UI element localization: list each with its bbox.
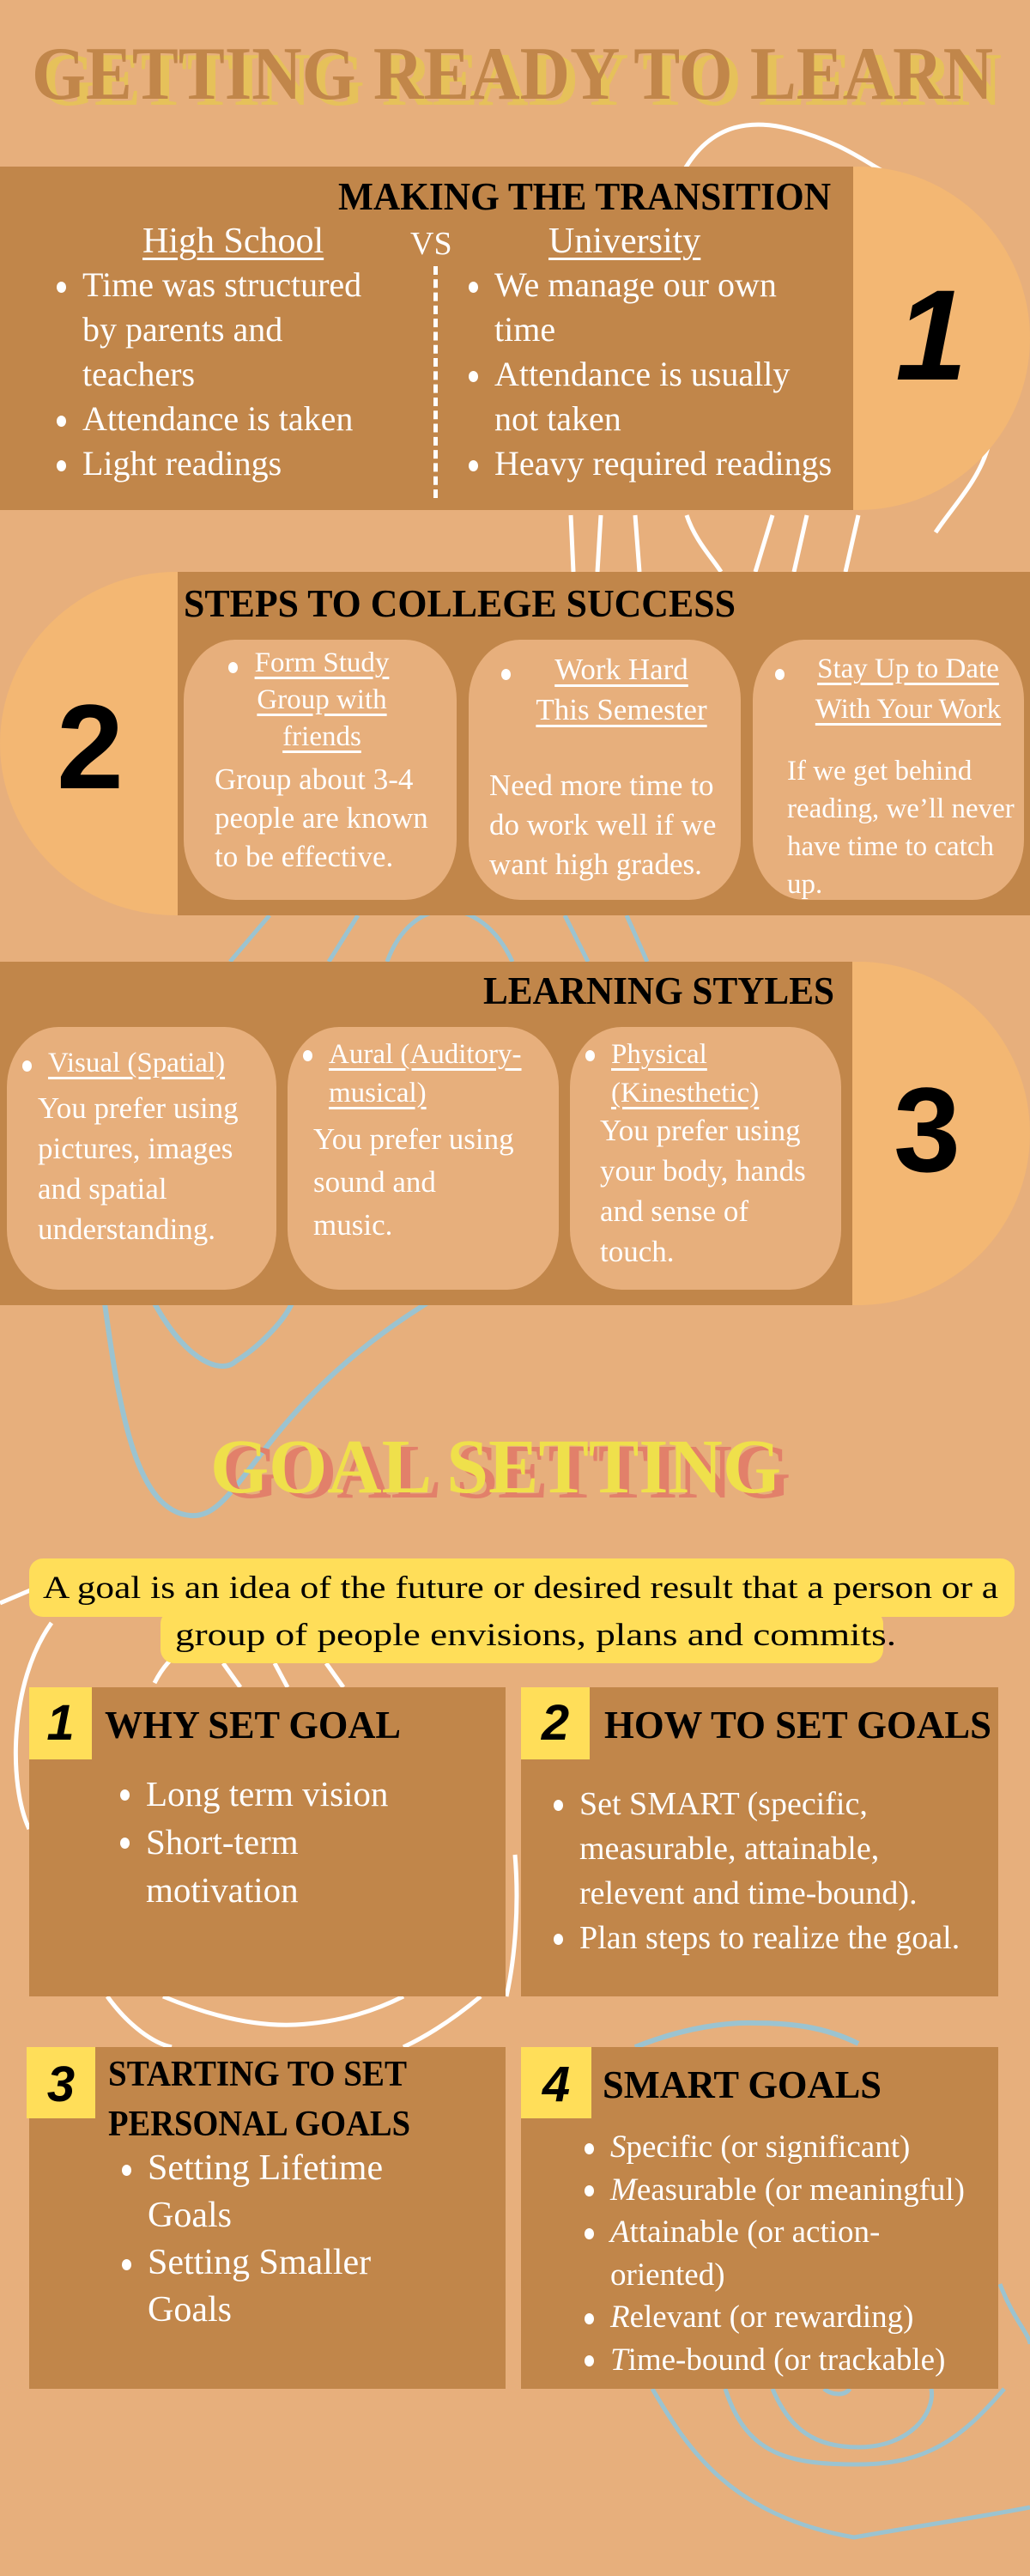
- list: Long term vision: [146, 1774, 388, 1814]
- card body: up.: [787, 869, 822, 900]
- card body: touch.: [600, 1235, 675, 1268]
- list: Goals: [148, 2196, 232, 2235]
- card title: Visual (Spatial): [48, 1048, 225, 1078]
- card body: sound and: [313, 1165, 436, 1199]
- card title: [254, 647, 390, 753]
- card title: Group with: [257, 684, 387, 715]
- column heading high school: High School: [142, 222, 324, 261]
- smart list: oriented): [610, 2257, 725, 2293]
- card body: You prefer using: [313, 1122, 514, 1156]
- list: [122, 2148, 383, 2330]
- card body: [313, 1122, 514, 1242]
- number badge 1: [29, 1687, 92, 1759]
- card title: [585, 1036, 857, 1113]
- card body: If we get behind: [787, 756, 972, 787]
- panel: learning styles: [0, 962, 852, 1305]
- list: Set SMART (specific,: [579, 1786, 868, 1822]
- card body: and spatial: [38, 1172, 167, 1206]
- card body: have time to catch: [787, 831, 994, 862]
- university list: We manage our own: [494, 265, 777, 304]
- university list: time: [494, 310, 555, 349]
- vs label: VS: [410, 226, 452, 262]
- card title: Stay Up to Date: [817, 653, 999, 684]
- card body: to be effective.: [215, 840, 393, 873]
- panel 2 circle: [0, 572, 352, 915]
- smart list: Specific (or significant): [610, 2129, 910, 2165]
- panel 1 circle: [687, 167, 1030, 510]
- title: goal setting: GOAL SETTING: [210, 1425, 781, 1510]
- high school list: teachers: [82, 355, 195, 393]
- panel: steps to college success: [178, 572, 1030, 915]
- card title: [303, 1036, 574, 1113]
- card body: do work well if we: [489, 808, 716, 841]
- number badge 2: [521, 1687, 590, 1759]
- list: motivation: [146, 1870, 299, 1910]
- smart list: Time-bound (or trackable): [610, 2342, 945, 2377]
- card title: (Kinesthetic): [611, 1078, 759, 1109]
- list: Plan steps to realize the goal.: [579, 1920, 960, 1956]
- card title: Form Study: [255, 647, 389, 678]
- list: measurable, attainable,: [579, 1831, 879, 1867]
- smart list: Relevant (or rewarding): [610, 2300, 913, 2335]
- university list: [469, 265, 832, 483]
- heading: STARTING TO SET: [108, 2055, 407, 2094]
- card title: friends: [282, 721, 361, 752]
- number badge 4: 4: [542, 2057, 570, 2112]
- card body: understanding.: [38, 1212, 215, 1246]
- card: work hard: [469, 640, 741, 900]
- definition callout: group of people envisions, plans and commits.: [175, 1618, 896, 1653]
- card body: want high grades.: [489, 848, 702, 881]
- high school list: by parents and: [82, 310, 282, 349]
- card title: Aural (Auditory-: [329, 1039, 522, 1070]
- card title: Work Hard: [554, 653, 688, 686]
- smart list: Measurable (or meaningful): [610, 2172, 965, 2207]
- list: Setting Smaller: [148, 2243, 371, 2282]
- card body: people are known: [215, 801, 428, 835]
- card: why set goal: [29, 1687, 506, 1996]
- university list: Heavy required readings: [494, 444, 832, 483]
- card title: musical): [329, 1078, 427, 1109]
- card title: With Your Work: [815, 694, 1001, 725]
- number 3: 3: [894, 1062, 960, 1197]
- card body: [489, 769, 716, 881]
- heading: [108, 2055, 410, 2144]
- high school list: Time was structured: [82, 265, 361, 304]
- card body: You prefer using: [38, 1091, 239, 1125]
- number badge 1: 1: [46, 1695, 75, 1751]
- number badge 3: 3: [47, 2057, 75, 2112]
- card body: music.: [313, 1208, 392, 1242]
- number badge 3: [27, 2047, 95, 2118]
- card: physical: [570, 1027, 841, 1290]
- card body: You prefer using: [600, 1114, 801, 1147]
- list: Goals: [148, 2290, 232, 2330]
- card body: reading, we’ll never: [787, 793, 1015, 824]
- card body: and sense of: [600, 1194, 748, 1228]
- smart list: Attainable (or action-: [610, 2215, 880, 2250]
- high school list: Attendance is taken: [82, 399, 353, 438]
- card body: Group about 3-4: [215, 762, 413, 796]
- card: form study group: [184, 640, 457, 900]
- card title: Physical: [611, 1039, 707, 1070]
- card: aural: [288, 1027, 559, 1290]
- card title: This Semester: [536, 693, 707, 726]
- card: starting to set personal goals: [29, 2047, 506, 2389]
- card body: Need more time to: [489, 769, 713, 802]
- definition callout: A goal is an idea of the future or desired result that a person or a: [43, 1571, 998, 1606]
- dashed divider: [433, 266, 438, 498]
- number badge 2: 2: [542, 1695, 569, 1751]
- card body: [215, 762, 428, 873]
- university list: Attendance is usually: [494, 355, 790, 393]
- card body: pictures, images: [38, 1132, 233, 1165]
- card: how to set goals: [521, 1687, 998, 1996]
- university list: not taken: [494, 399, 621, 438]
- number 2: 2: [57, 679, 124, 814]
- number badge 4: [521, 2047, 591, 2118]
- definition callout: [29, 1558, 1015, 1663]
- card: visual: [7, 1027, 276, 1290]
- card: smart goals: [521, 2047, 998, 2389]
- high school list: Light readings: [82, 444, 282, 483]
- high school list: [57, 265, 361, 483]
- card: stay up to date: [753, 640, 1024, 900]
- smart list: [585, 2129, 965, 2377]
- panel 3 circle: [687, 962, 1030, 1305]
- list: relevent and time-bound).: [579, 1875, 918, 1911]
- card body: your body, hands: [600, 1154, 806, 1188]
- card title: [536, 653, 707, 727]
- list: [554, 1786, 960, 1956]
- card body: [38, 1091, 239, 1246]
- panel: making the transition: [0, 167, 853, 510]
- list: Setting Lifetime: [148, 2148, 383, 2188]
- number 1: 1: [895, 263, 967, 407]
- card body: [787, 756, 1015, 900]
- card body: [600, 1114, 806, 1268]
- list: [120, 1774, 388, 1910]
- list: Short-term: [146, 1822, 299, 1862]
- card title: [815, 653, 1001, 726]
- column heading university: University: [548, 222, 700, 261]
